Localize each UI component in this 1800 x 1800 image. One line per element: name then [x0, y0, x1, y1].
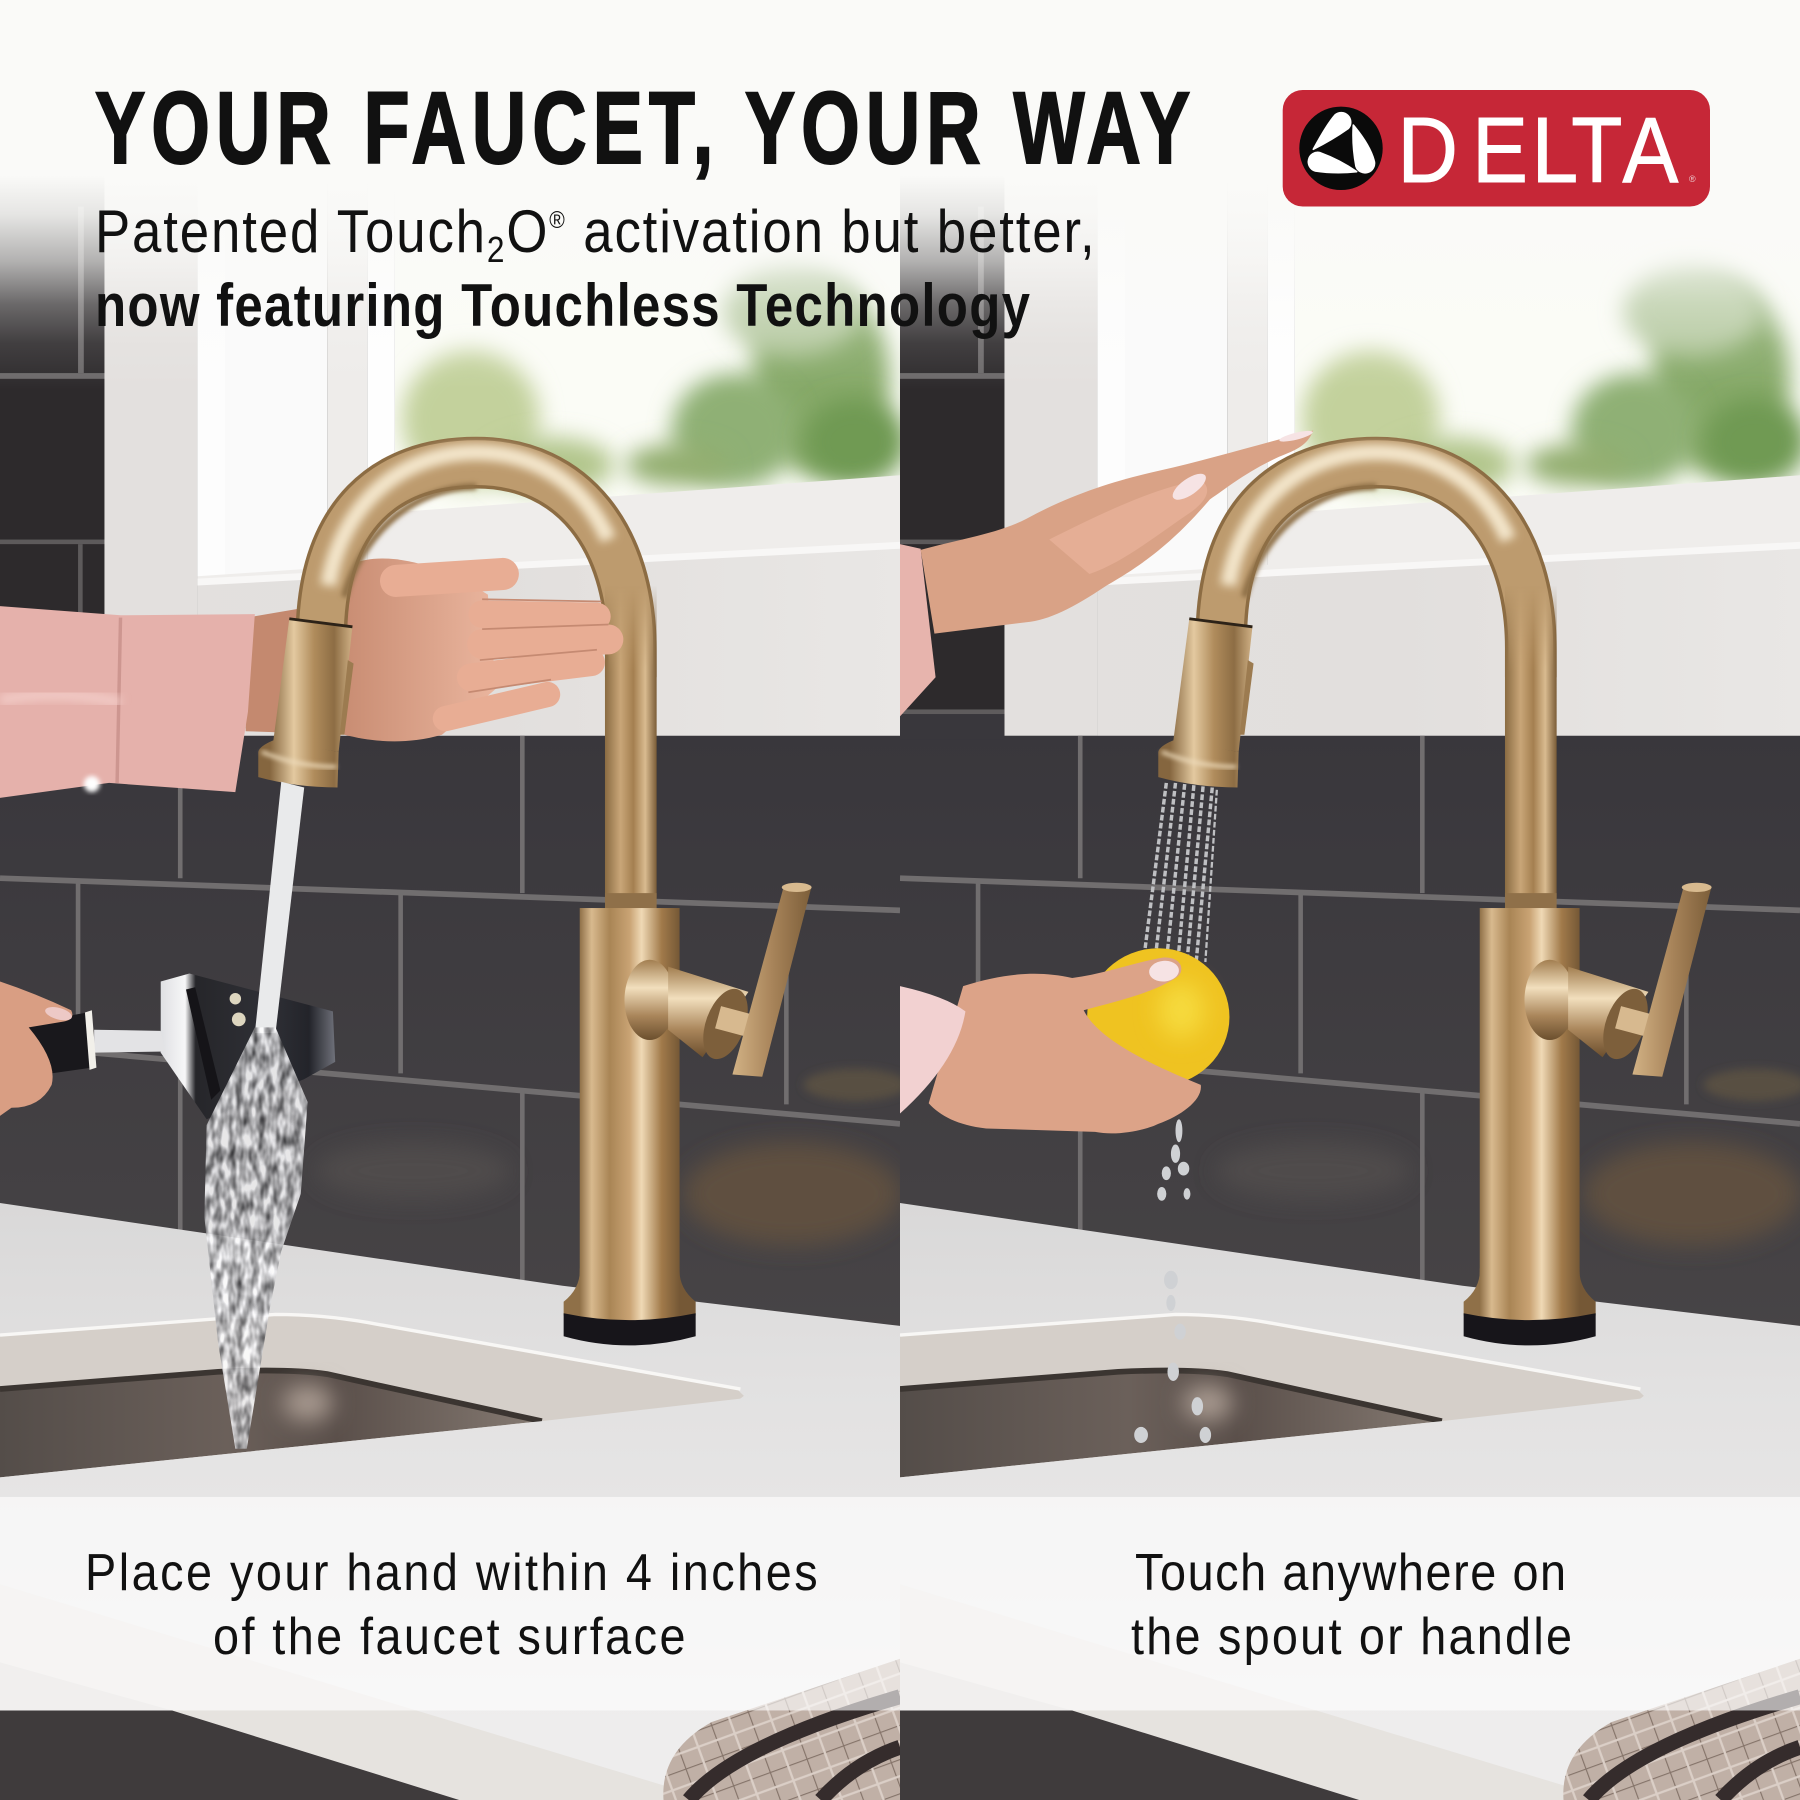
subtitle line: touchless technology: now featuring Touchless Technology [95, 272, 1030, 339]
panel: right touch photo [900, 191, 1800, 1800]
caption: right panel: Touch anywhere on [1135, 1544, 1566, 1602]
icon: Delta tri-lobe mark [1299, 107, 1383, 190]
kitchen backdrop [900, 191, 1800, 1800]
upper hand touching spout [900, 429, 1314, 716]
spray [1143, 783, 1217, 962]
caption: left panel: Place your hand within 4 inches [85, 1544, 818, 1602]
caption: left panel: of the faucet surface [213, 1608, 686, 1666]
registered mark: ® [1689, 174, 1696, 184]
lower hand and sleeve [900, 957, 1201, 1133]
wordmark: DELTA [1397, 98, 1678, 202]
fingers [396, 574, 608, 719]
subtitle line: patented activation: ® [549, 207, 565, 233]
kitchen backdrop [0, 191, 900, 1800]
logo: Delta [1283, 90, 1710, 206]
caption: left panel [85, 1544, 818, 1666]
top fade overlay [0, 0, 1800, 390]
subtitle line: patented activation: O [506, 198, 547, 265]
subtitle line: patented activation: activation but better, [567, 198, 1095, 265]
peeler and hand [0, 973, 335, 1119]
lemon [1087, 948, 1229, 1086]
water drips [1134, 1119, 1211, 1443]
faucet [1158, 452, 1712, 1345]
faucet [258, 452, 812, 1345]
subtitle line: patented activation: Patented Touch [95, 198, 485, 265]
palm of hand near faucet [344, 558, 496, 741]
subtitle line: patented activation: 2 [487, 230, 505, 270]
panel: left hand-wave photo [0, 191, 900, 1800]
caption: right panel [1131, 1544, 1572, 1666]
water stream [204, 782, 308, 1449]
caption: right panel: the spout or handle [1131, 1608, 1572, 1666]
sleeve and forearm [0, 597, 367, 798]
title: YOUR FAUCET, YOUR WAY [95, 72, 1190, 186]
